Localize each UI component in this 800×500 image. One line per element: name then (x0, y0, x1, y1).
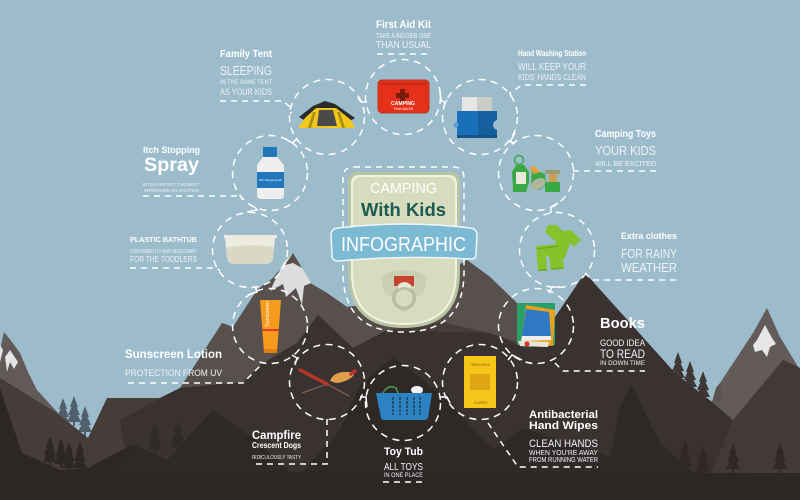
badge title: camping: CAMPING (370, 181, 437, 197)
text: plastic bathtub: PLASTIC BATHTUB (130, 235, 198, 244)
text: books: Books (600, 315, 645, 332)
text: camping toys: WILL BE EXCITED (595, 159, 657, 168)
text: hand washing station: Hand Washing Station (518, 49, 586, 58)
icon: wipes pack (464, 356, 496, 408)
text: family tent: SLEEPING (220, 64, 272, 78)
text: hand washing station: KIDS' HANDS CLEAN (518, 73, 586, 82)
icon: water container (454, 97, 503, 138)
item: camping toys (512, 128, 657, 192)
badge title: with kids: With Kids (361, 200, 446, 220)
text: extra clothes (585, 231, 677, 280)
text: plastic bathtub: CONVENIENTLY AND NECESSARY (130, 249, 198, 255)
text: camping toys: Camping Toys (595, 128, 656, 140)
text: hand washing station (510, 49, 586, 99)
text: first aid kit (376, 19, 431, 54)
icon: pacifier (382, 270, 426, 312)
text: family tent: AS YOUR KIDS (220, 87, 272, 97)
item: books (517, 303, 646, 371)
text: hand wipes: Antibacterial (529, 409, 598, 421)
text: books: IN DOWN TIME (600, 360, 646, 367)
text: first aid kit: First Aid Kit (376, 19, 431, 31)
item: hand washing station (454, 49, 586, 138)
text: plastic bathtub (130, 235, 220, 271)
item: sunscreen (125, 300, 281, 383)
icon: wipes pack: 20 WIPES (474, 400, 487, 405)
item: hand wipes (464, 356, 598, 467)
icon: first aid bag: First Aid Kit (394, 107, 413, 111)
text: first aid kit: THAN USUAL (376, 40, 431, 51)
text: hand wipes: WHEN YOU'RE AWAY (529, 448, 598, 457)
text: itch spray: BITES ARE NOT THE BEST (143, 182, 199, 188)
icon: crescent dogs on skewers (300, 370, 355, 396)
icon: basket (376, 386, 432, 420)
text: family tent: IN THE SAME TENT (220, 80, 272, 86)
text: camping toys: YOUR KIDS (595, 143, 656, 158)
item: family tent (220, 48, 355, 128)
icon: stack of books (517, 303, 555, 347)
text: family tent (220, 48, 291, 114)
text: camping toys (573, 128, 657, 171)
text: campfire: Campfire (252, 428, 301, 442)
item: plastic bathtub (130, 235, 277, 271)
icon: tent (298, 101, 355, 128)
infographic ribbon: INFOGRAPHIC (341, 234, 466, 256)
item: first aid kit (376, 19, 431, 113)
icon: first aid bag: CAMPING (391, 101, 415, 107)
item: campfire dogs (252, 370, 355, 464)
text: toy tub (383, 446, 423, 482)
text: books: TO READ (600, 349, 645, 361)
text: extra clothes: FOR RAINY (621, 246, 677, 261)
text: books (555, 315, 646, 371)
text: family tent: Family Tent (220, 48, 272, 60)
infographic ribbon (331, 224, 477, 261)
text: campfire: RIDICULOUSLY TASTY (252, 455, 301, 461)
text: sunscreen (125, 349, 263, 383)
icon: spray bottle: Itch Stopping Gel (259, 178, 282, 182)
text: hand wipes: CLEAN HANDS (529, 438, 598, 450)
text: extra clothes: WEATHER (621, 260, 677, 275)
text: hand wipes (488, 409, 598, 467)
text: campfire (252, 419, 327, 464)
text: books: GOOD IDEA (600, 338, 645, 348)
text: itch spray: Itch Stopping (143, 145, 200, 156)
text: itch spray: IMPRESSION ON VACATION (144, 188, 199, 194)
icon: sunscreen tube: Sunscreen (265, 301, 271, 327)
text: sunscreen: Sunscreen Lotion (125, 349, 222, 361)
text: sunscreen: PROTECTION FROM UV (125, 368, 223, 379)
icon: bathtub (224, 235, 277, 264)
text: campfire: Crescent Dogs (252, 441, 301, 450)
mountain landscape (0, 253, 800, 500)
text: extra clothes: Extra clothes (621, 231, 677, 242)
icon: wipes pack: TRAVEL PACK (470, 363, 491, 367)
item: extra clothes (536, 225, 677, 280)
text: hand wipes: FROM RUNNING WATER (529, 457, 598, 464)
icon: green clothes (536, 225, 581, 271)
central badge (331, 167, 477, 332)
text: toy tub: Toy Tub (384, 446, 423, 458)
text: itch spray: Spray (144, 155, 199, 176)
text: first aid kit: TAKE A BIGGER ONE (376, 33, 431, 40)
icon: sunscreen tube (260, 300, 281, 353)
text: hand washing station: WILL KEEP YOUR (518, 61, 586, 73)
icon: spray bottle (257, 147, 284, 199)
icon: lantern and stove (512, 156, 560, 192)
item: itch spray (143, 145, 284, 200)
icon: first aid bag (378, 80, 429, 113)
text: hand wipes: Hand Wipes (529, 420, 598, 432)
text: itch spray (143, 145, 243, 200)
item: toy tub (376, 386, 432, 482)
text: toy tub: ALL TOYS (384, 462, 423, 473)
dashed connector ring (212, 60, 594, 440)
text: toy tub: IN ONE PLACE (384, 473, 423, 479)
text: plastic bathtub: FOR THE TODDLERS (130, 255, 197, 264)
